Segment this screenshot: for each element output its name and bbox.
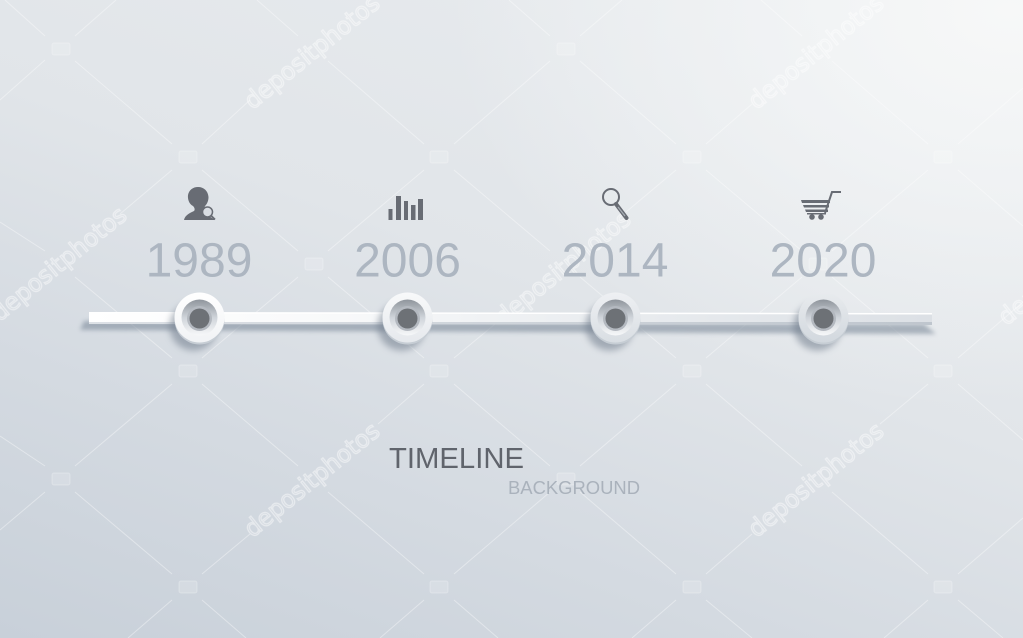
timeline bar bbox=[80, 312, 936, 334]
node 2020 bbox=[794, 292, 848, 350]
icon: shopping cart bbox=[801, 192, 841, 220]
title: TIMELINE bbox=[389, 443, 524, 475]
watermark text: depositphotos bbox=[239, 417, 385, 543]
watermark text: depositphotos bbox=[490, 205, 636, 331]
watermark text: depositphotos bbox=[743, 417, 889, 543]
year 2020: 2020 bbox=[770, 234, 876, 288]
icon: person with magnifier bbox=[184, 187, 215, 220]
node 2006 bbox=[378, 292, 432, 350]
node 1989 bbox=[170, 292, 224, 350]
year 1989: 1989 bbox=[146, 234, 252, 288]
icon: magnifier bbox=[603, 189, 626, 218]
subtitle: BACKGROUND bbox=[508, 478, 640, 498]
watermark camera marks bbox=[52, 43, 952, 593]
year 2006: 2006 bbox=[354, 234, 461, 288]
icon: bar chart bbox=[388, 196, 423, 220]
year 2014: 2014 bbox=[562, 234, 668, 288]
node 2014 bbox=[586, 292, 640, 350]
